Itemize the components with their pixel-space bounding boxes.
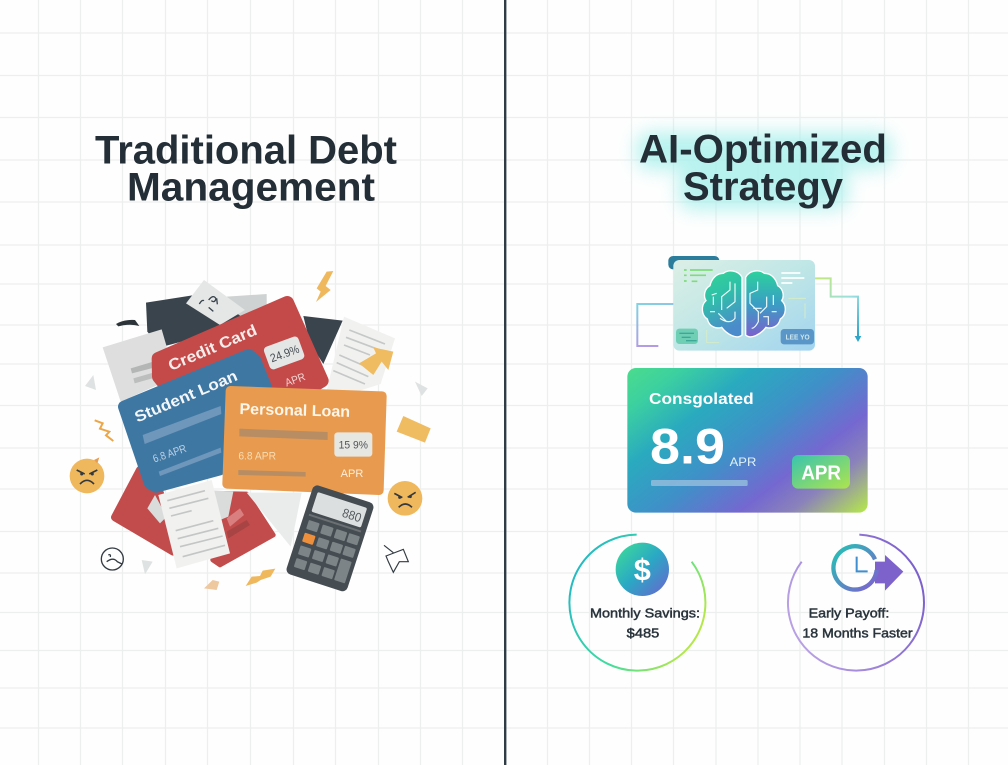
metric: early payoff: Early Payoff: (809, 605, 889, 620)
icon: clock arrow (833, 546, 903, 591)
illustration: pile of debt (70, 271, 431, 593)
personal loan card: APR (341, 468, 363, 480)
icon: dollar coin: $ (634, 553, 651, 587)
card: consolidated apr: APR (730, 455, 756, 469)
bottom document (158, 480, 230, 568)
title: ai-optimized strategy: AI-Optimized (639, 128, 887, 172)
icon: cursor doodle (384, 545, 408, 572)
metric: monthly savings: Monthly Savings: (590, 605, 700, 620)
ink smudge (116, 320, 139, 326)
personal loan card: 6.8 APR (238, 450, 276, 462)
grey wedge (247, 493, 302, 547)
white lines (781, 273, 804, 283)
ring (788, 535, 924, 671)
central divider (504, 0, 506, 765)
title: traditional debt management: Management (127, 166, 375, 210)
scribbled note (186, 280, 245, 325)
credit card: APR (284, 371, 307, 389)
rate badge (263, 335, 305, 371)
title: traditional debt management: Traditional Debt (95, 128, 397, 172)
brain left (702, 271, 742, 337)
dark folder (146, 293, 250, 347)
right document (327, 317, 395, 391)
small circuit (707, 298, 806, 343)
student loan card (124, 355, 268, 487)
connector left (637, 301, 682, 346)
connector right (814, 278, 861, 342)
icon: lightning bottom (246, 569, 275, 586)
ring (569, 535, 705, 671)
rate badge: 15 9% (339, 440, 368, 452)
apr badge: APR (801, 462, 842, 484)
personal loan card: Personal Loan (239, 401, 350, 421)
apr badge (792, 455, 850, 489)
student loan card: 6.8 APR (151, 443, 188, 466)
debris (85, 375, 428, 574)
card: consolidated apr: Consgolated (649, 391, 754, 408)
metric: early payoff: 18 Months Faster (802, 626, 913, 641)
mini badge left (676, 329, 698, 344)
orange tag (397, 416, 431, 443)
card: consolidated apr (627, 368, 868, 513)
illustration: ai brain dashboard (637, 256, 861, 351)
icon: clock doodle (101, 548, 123, 570)
icon: arrow up (359, 347, 393, 375)
metric: early payoff (788, 535, 924, 671)
dashboard card (673, 260, 815, 351)
icon: angry face left (70, 457, 104, 493)
title: traditional debt management (95, 128, 397, 210)
grey envelope (103, 329, 167, 402)
title: ai-optimized strategy (636, 128, 892, 210)
mini badge right: LEE YO (786, 334, 810, 341)
rate badge (334, 432, 372, 457)
bottom red card (115, 470, 273, 565)
personal loan card (227, 391, 382, 490)
card: consolidated apr: 8.9 (650, 418, 725, 474)
icon: lightning left (95, 420, 113, 441)
rate badge: 24.9% (269, 343, 301, 365)
title: ai-optimized strategy: Strategy (683, 165, 844, 209)
metric: monthly savings: $485 (627, 626, 659, 641)
code lines (684, 270, 713, 281)
calculator (285, 484, 375, 593)
credit card: Credit Card (166, 322, 260, 375)
brain right (746, 271, 785, 337)
mini badge right (781, 329, 814, 344)
icon: lightning top (316, 271, 333, 302)
student loan card: Student Loan (132, 368, 240, 426)
metric: monthly savings (569, 535, 705, 671)
calculator: 880 (340, 506, 363, 525)
back tab (668, 256, 719, 269)
icon: angry face right (388, 481, 422, 516)
credit card (158, 303, 322, 395)
